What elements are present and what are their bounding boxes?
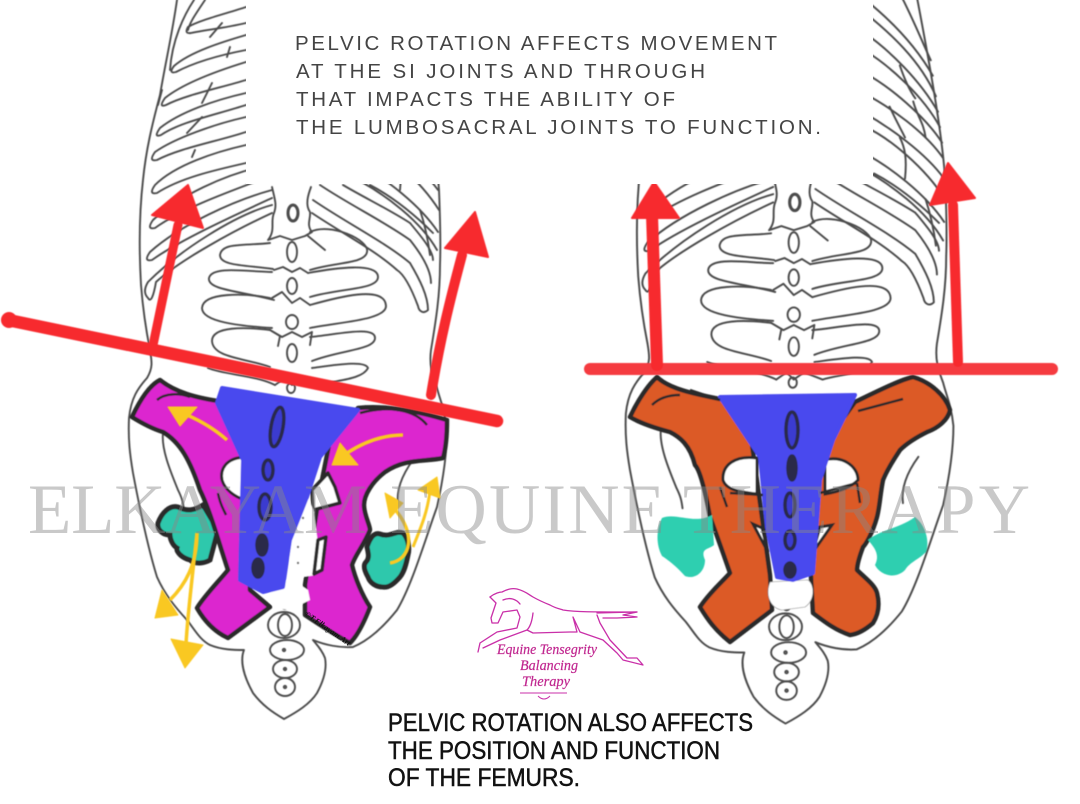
left obturator opening [222,457,245,500]
femur heads (teal) [658,515,927,577]
logo: Equine Tensegrity Balancing Therapy [478,589,643,699]
tilted pelvis line [1,312,497,421]
left femur head (teal) [158,505,218,563]
arrow: left femur outward [155,533,197,618]
watermark: EQUINE [390,471,665,549]
sacrum tip (white) [266,578,310,610]
left skeleton line drawing [129,0,447,719]
right arrow, level side [930,163,975,362]
watermark: ELKAYAM [28,471,367,549]
left ilium (magenta) [132,380,270,638]
white sacral strip [290,497,317,578]
yellow movement arrows [155,407,440,668]
logo lettering: Balancing [520,658,578,674]
watermark: THERAPY [683,471,1030,549]
left arrow, level side [632,182,679,365]
copyright mark: ©T.Elkayam.Art [303,609,353,648]
caption text: OF THE FEMURS. [388,764,580,792]
right ilium (orange) [810,377,950,635]
right skeleton line drawing [626,0,953,724]
heading text: AT THE SI JOINTS AND THROUGH [296,60,705,83]
sacrum (blue) [720,395,855,580]
arrow: right femur up-right [413,477,440,547]
heading text: THE LUMBOSACRAL JOINTS TO FUNCTION. [296,116,821,139]
lower sacral slit [314,537,326,574]
arrow: right femur up-left [385,493,409,563]
right femur head (teal) [364,532,409,587]
ilium crest lines [652,390,903,507]
logo lettering [496,642,597,690]
red alignment lines and arrows [1,163,1052,421]
arrow: left ilium up [168,407,227,440]
logo lettering: Therapy [522,674,570,690]
heading text: PELVIC ROTATION AFFECTS MOVEMENT [295,32,777,55]
caption text: PELVIC ROTATION ALSO AFFECTS [388,709,753,737]
left ilium (orange) [630,377,772,642]
horse outline [478,589,643,665]
level pelvis line [590,363,1052,375]
heading text: THAT IMPACTS THE ABILITY OF [296,88,675,111]
logo lettering: Equine Tensegrity [496,642,597,658]
ilium crest lines [157,394,427,515]
diagram: right level pelvis [626,0,953,724]
arrow: right ilium inward [332,435,403,465]
caption text: THE POSITION AND FUNCTION [388,737,720,765]
sacral strip dots [297,517,304,564]
white heading panel [246,0,873,184]
diagram: left rotated pelvis [129,0,447,719]
obturator openings [723,457,858,552]
caption text [388,709,753,792]
sacrum (blue) [217,388,358,592]
right arrow, rotated side [431,212,488,395]
left arrow, rotated side [152,185,203,350]
sacral foramina [253,406,286,577]
logo flourish [520,693,567,699]
sacral foramina [785,412,798,577]
right ilium (magenta) [305,407,447,643]
right obturator opening [312,473,340,510]
heading text [295,32,821,139]
watermark [28,471,1030,549]
sacrum tip (white) [768,580,813,610]
arrow: left femur down [171,533,203,668]
